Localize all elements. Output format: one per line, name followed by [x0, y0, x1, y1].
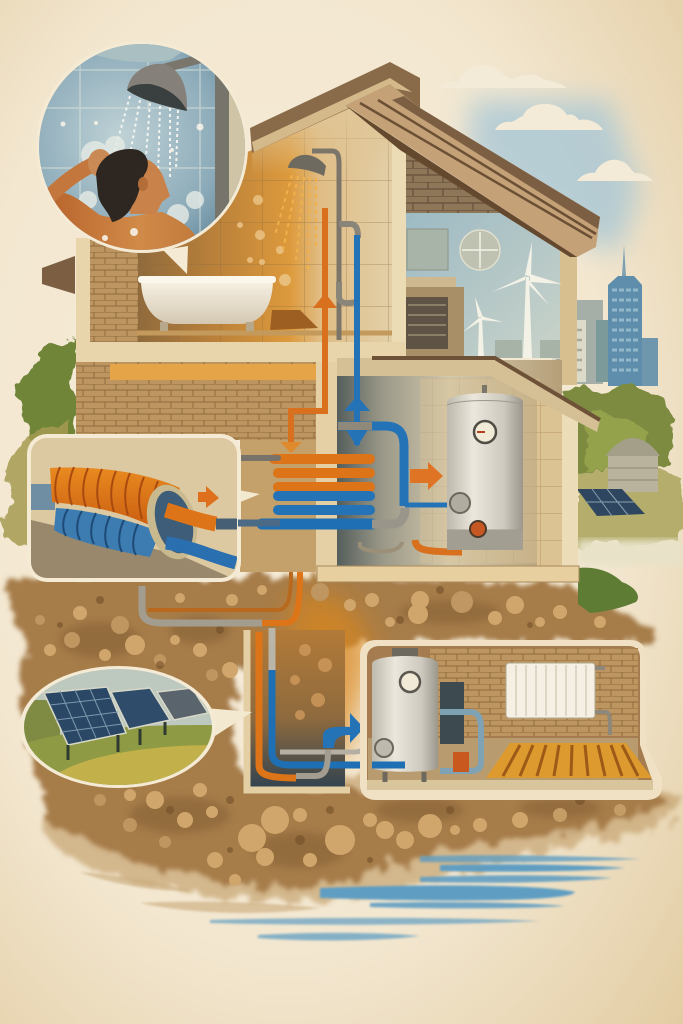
first floor slab: [76, 342, 406, 362]
back and shoulder: [50, 193, 196, 250]
pump valve: [453, 752, 469, 772]
outer right post: [562, 413, 578, 568]
upper right window: [406, 213, 560, 358]
shower callout: [36, 40, 253, 274]
soil ground: [13, 575, 680, 901]
pipe sleeve: [146, 484, 197, 560]
utility roof: [337, 358, 600, 432]
post between rooms: [392, 138, 406, 360]
bath splashes: [237, 195, 291, 286]
window clock icon: [460, 230, 500, 270]
window frame panel: [407, 229, 448, 270]
solar callout: [20, 666, 252, 790]
hand: [88, 149, 110, 176]
left post: [76, 238, 90, 350]
cream water behind field: [578, 540, 683, 566]
top haze: [96, 44, 182, 62]
glass frame: [215, 74, 229, 220]
bathroom floor debris: [270, 310, 318, 330]
shower arm: [165, 58, 203, 68]
blue inner pipe: [166, 543, 236, 563]
orange riser with arrows: [280, 208, 337, 453]
sky wash: [470, 100, 640, 250]
roof right stripes: [360, 100, 596, 238]
ground floor left room: [110, 362, 316, 440]
utility piping: [338, 426, 462, 552]
tile post: [316, 362, 337, 572]
water pool: [210, 855, 640, 940]
shower with water: [275, 151, 339, 340]
tile lines: [41, 62, 215, 232]
lower wall behind callout: [240, 440, 318, 572]
soil warm glow: [290, 590, 372, 760]
soil mass: [13, 575, 668, 886]
neck and face: [128, 158, 170, 214]
utility roof edge: [372, 358, 600, 420]
foam: [79, 136, 204, 226]
bathroom interior: [137, 105, 392, 345]
solar panels: [44, 687, 208, 745]
bathroom upper light: [252, 105, 392, 175]
basement blue arrow: [323, 713, 364, 748]
hair: [96, 149, 148, 222]
pump piping: [440, 712, 481, 771]
outer right tiles: [537, 400, 563, 568]
city skyline: [552, 245, 658, 386]
blue pipe in front of tank: [372, 762, 405, 768]
water tank upper: [447, 385, 523, 550]
soil dark specks: [57, 586, 585, 863]
floor base: [368, 738, 638, 780]
shelf: [406, 277, 456, 287]
roof underside shadow: [345, 105, 577, 257]
wind turbine small: [463, 297, 503, 358]
upper right side wall: [560, 245, 577, 385]
warm lit ceiling band: [110, 364, 316, 380]
attic bricks: [406, 150, 507, 213]
direction arrow: [198, 486, 219, 508]
radiator: [506, 663, 610, 735]
ear: [138, 177, 148, 191]
main roof left slope: [250, 62, 420, 153]
orange side arrow: [410, 462, 443, 490]
roof right slope: [346, 84, 600, 257]
soil wash fringe: [43, 770, 680, 901]
grey U pipes: [339, 224, 358, 303]
bush: [578, 568, 638, 613]
basement shaft: [246, 630, 350, 790]
base strip: [367, 780, 653, 790]
basement brick wall: [430, 648, 638, 736]
blue riser with arrows: [344, 235, 370, 447]
blue insulated pipe: [54, 508, 160, 557]
water streams: [115, 96, 178, 180]
small solar panel: [577, 489, 645, 516]
soil pebbles: [35, 583, 626, 886]
house: [42, 62, 600, 582]
connector pipe from callout: [238, 520, 280, 526]
heat exchanger coils: [240, 458, 372, 524]
foundation: [317, 566, 579, 582]
ground floor left wall: [76, 362, 110, 438]
clouds: [440, 65, 653, 181]
orange inner pipe: [166, 510, 216, 524]
shower head: [127, 64, 187, 111]
orange insulated pipe: [50, 468, 180, 530]
basement pump: [440, 682, 464, 744]
faint skyline in window: [495, 340, 560, 358]
right pane: [229, 92, 245, 202]
callout: pipe close-up: [27, 434, 260, 582]
basement connector pipes: [142, 572, 405, 778]
droplets: [60, 121, 204, 241]
underfloor heating: [486, 743, 652, 778]
utility tile grid: [420, 378, 540, 563]
basement room: [360, 640, 662, 800]
pipe outlet: [216, 518, 237, 530]
bathroom tile grid: [137, 105, 392, 345]
soil dark mottling: [60, 600, 600, 868]
left brick column: [90, 238, 138, 346]
bath room floor line: [137, 330, 392, 336]
left eave: [42, 256, 75, 294]
left roof highlight: [252, 78, 412, 152]
soil wash strokes: [80, 872, 320, 913]
basement tank: [372, 648, 438, 782]
vent unit: [406, 287, 464, 357]
wind turbine large: [492, 242, 562, 358]
storage silo: [606, 438, 660, 492]
utility room: [337, 360, 562, 568]
bathtub: [138, 276, 276, 331]
trees: [4, 335, 683, 560]
roof right dark band: [392, 96, 600, 229]
raised arm: [50, 165, 92, 196]
